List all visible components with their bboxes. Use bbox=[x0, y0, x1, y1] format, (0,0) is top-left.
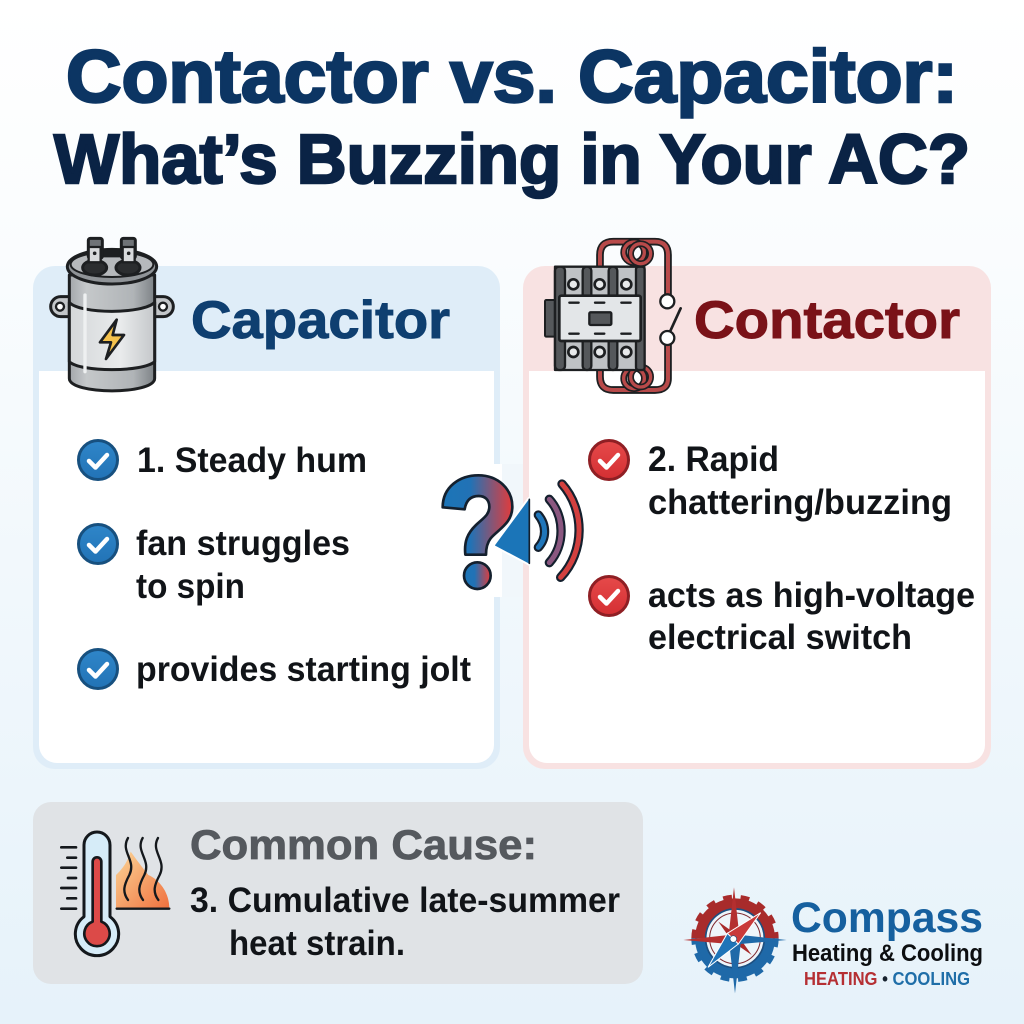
common cause text: 3. Cumulative late-summer bbox=[190, 881, 620, 920]
icon: capacitor bbox=[51, 238, 173, 391]
common cause heading: Common Cause: bbox=[190, 821, 537, 868]
panel: common cause bbox=[33, 802, 643, 984]
contactor item 1 bbox=[590, 440, 952, 522]
capacitor item 1: 1. Steady hum bbox=[137, 441, 367, 480]
capacitor heading: Capacitor bbox=[191, 291, 450, 350]
common cause text: heat strain. bbox=[229, 924, 405, 963]
icon: question mark and speaker bbox=[443, 475, 579, 589]
capacitor item 2: to spin bbox=[136, 567, 245, 606]
speaker bbox=[495, 499, 529, 563]
sound waves bbox=[538, 515, 545, 547]
title bbox=[54, 35, 970, 198]
panel: capacitor bbox=[33, 266, 500, 769]
common cause text bbox=[190, 881, 620, 963]
logo: compass heating and cooling bbox=[683, 887, 983, 993]
lid bbox=[67, 249, 157, 284]
thermometer bbox=[75, 832, 119, 956]
lightning bolt bbox=[100, 320, 124, 359]
gap behind centre icon bbox=[494, 464, 503, 597]
terminals bbox=[88, 238, 102, 258]
title: What’s Buzzing in Your AC? bbox=[54, 120, 970, 198]
contactor heading: Contactor bbox=[694, 291, 960, 350]
title: Contactor vs. Capacitor: bbox=[66, 35, 958, 118]
capacitor item 2: fan struggles bbox=[136, 524, 350, 563]
icon: contactor bbox=[545, 242, 681, 390]
logo tagline: HEATING • COOLING bbox=[804, 968, 970, 989]
can body bbox=[69, 275, 155, 391]
mounting tabs bbox=[51, 297, 173, 317]
coil wires bbox=[600, 242, 668, 390]
switch bbox=[660, 294, 674, 308]
logo subtitle: Heating & Cooling bbox=[792, 940, 983, 967]
capacitor item 3: provides starting jolt bbox=[136, 650, 471, 689]
logo name: Compass bbox=[791, 894, 983, 942]
contactor item 1: 2. Rapid bbox=[648, 440, 779, 479]
question mark bbox=[443, 475, 512, 555]
contactor item 1: chattering/buzzing bbox=[648, 483, 952, 522]
flames bbox=[116, 852, 169, 909]
icon: thermometer and heat bbox=[61, 832, 169, 956]
capacitor item 2 bbox=[78, 524, 350, 606]
contactor item 2: acts as high-voltage bbox=[648, 576, 975, 615]
contactor item 2 bbox=[590, 576, 975, 657]
panel: contactor bbox=[523, 266, 991, 769]
contactor item 2: electrical switch bbox=[648, 618, 912, 657]
body bbox=[545, 300, 558, 337]
scale marks bbox=[61, 847, 76, 909]
icon: compass gear bbox=[683, 887, 787, 993]
